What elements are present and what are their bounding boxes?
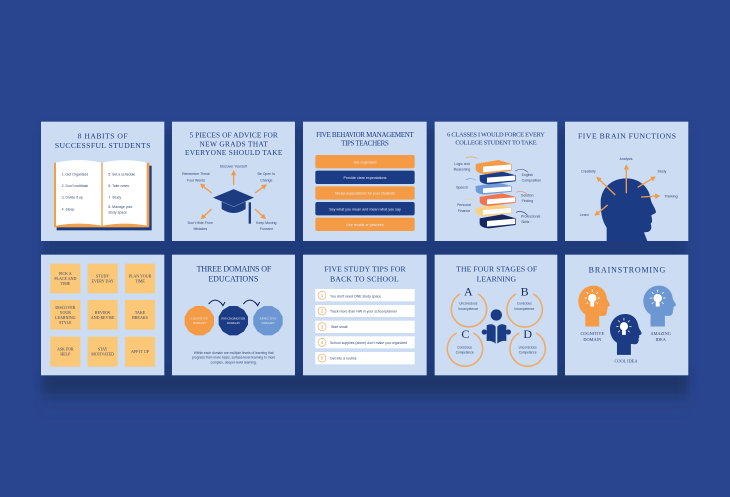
labels: Composition [522, 178, 541, 182]
icon: open book with habits list: 8. Manage your [108, 205, 133, 209]
heading: stages: THE FOUR STAGES OF [456, 265, 537, 274]
heading: domains [197, 265, 272, 284]
labels: Don't Hide From [188, 221, 213, 225]
domain badges: DOMAIN [227, 321, 241, 325]
tips list: Get into a routine [330, 357, 357, 361]
panel: 6 classes [435, 122, 557, 241]
heading: classes: COLLEGE STUDENT TO TAKE [455, 139, 537, 146]
tips list: 5 [321, 356, 324, 361]
icon: student reading [482, 309, 511, 344]
list of tips: Get organized [354, 160, 376, 164]
icon: open book with habits list: 3. Divide it up [62, 196, 83, 200]
panel: five behavior management tips [303, 122, 427, 241]
icon: navy head [610, 314, 642, 355]
domain badges [185, 306, 283, 335]
labels: Remember These [182, 172, 210, 176]
labels: Thinking [664, 194, 678, 198]
arrows [202, 172, 265, 218]
icon: light blue head [643, 286, 676, 326]
heading: domains: THREE DOMAINS OF [197, 265, 272, 274]
labels: Finance [458, 209, 470, 213]
curved arrows [466, 157, 528, 215]
labels: Learn [580, 213, 589, 217]
labels: Skills [521, 220, 530, 224]
heading: 8 habits [55, 131, 150, 150]
stage letters: C [461, 327, 469, 341]
heading: advice [185, 131, 283, 157]
sticky note text: PLAN YOUR [129, 274, 152, 279]
sticky note text: HELP [60, 351, 71, 356]
sticky note text: PLACE AND [54, 276, 76, 281]
description: complex, deeper-level learning. [211, 360, 257, 364]
labels: Finding [522, 199, 533, 203]
heading: advice: 5 PIECES OF ADVICE FOR [189, 131, 278, 140]
labels [454, 162, 541, 224]
sticky note grid [50, 264, 155, 367]
labels: Discover Yourself [220, 164, 247, 168]
labels: DOMAIN [583, 337, 602, 342]
tips list: Track more than HW in your school planner [330, 309, 398, 313]
labels: COOL IDEA [614, 359, 638, 364]
panel: five study tips [303, 255, 427, 375]
sticky note text: YOUR [60, 310, 71, 315]
arrows [596, 167, 658, 214]
icon: open book with habits list: 5. Set a schedule [108, 172, 135, 176]
sticky note text: APP IT UP [131, 349, 150, 354]
labels: Study [658, 169, 667, 173]
domain badges: AFFECTIVE [259, 317, 277, 321]
labels: Be Open to [257, 172, 275, 176]
panel: four stages of learning [435, 255, 557, 375]
domain badges: COGNITIVE [191, 317, 208, 321]
domain badges: DOMAIN [261, 321, 275, 325]
tips list: Start small [331, 325, 348, 329]
sticky note text: TIME [60, 281, 71, 286]
labels: IDEA [655, 337, 667, 342]
panel: brainstorming [565, 255, 688, 375]
labels: Keep Moving [256, 221, 277, 225]
labels: COGNITIVE [581, 331, 604, 336]
stage labels [456, 302, 537, 354]
domain badges: DOMAIN [193, 321, 207, 325]
labels: English [522, 173, 533, 177]
description: progress from more basic, surface-level learning to more [192, 356, 276, 360]
heading: study tips: FIVE STUDY TIPS FOR [324, 264, 407, 273]
heading: behavior: TIPS TEACHERS [341, 140, 389, 148]
sticky note text: PICK A [59, 271, 72, 276]
panel: sticky notes [41, 255, 164, 375]
labels: AMAZING [650, 331, 671, 336]
tips list [315, 289, 415, 364]
labels [581, 331, 671, 364]
panel: three domains [172, 255, 295, 375]
list of tips: Provide clear expectations [344, 176, 387, 180]
heading: brainstorming: BRAINSTROMING [589, 265, 666, 274]
stage labels: Unconscious [459, 302, 478, 306]
heading: study tips: BACK TO SCHOOL [330, 274, 399, 283]
stage letters: D [523, 327, 532, 341]
sticky note text: DISCOVER [55, 305, 76, 310]
labels: Professional [521, 215, 540, 219]
heading: 8 habits: 8 HABITS OF [78, 131, 128, 140]
sticky note text: EVERY DAY [92, 279, 114, 284]
icon: open book with habits list: 7. Study [108, 196, 121, 200]
list of tips: Use recalls or gestures [346, 223, 384, 227]
stage labels: Conscious [517, 302, 532, 306]
sticky note text: AND REVISE [91, 315, 115, 320]
stage labels: Competence [456, 350, 474, 354]
labels: Forward [260, 227, 273, 231]
stage letters: B [521, 284, 529, 298]
stage rings [447, 294, 545, 366]
list of tips [315, 155, 415, 231]
sticky note text: STAY [98, 346, 108, 351]
icon: open book with habits list: 6. Take notes [108, 184, 129, 188]
labels: Change [260, 178, 272, 182]
sticky note text: BREAKS [132, 315, 148, 320]
icon: orange head [578, 286, 610, 326]
heading: stages [456, 265, 537, 284]
tips list: 3 [321, 324, 324, 329]
labels: Analysis [620, 157, 633, 161]
labels: Solution [521, 193, 534, 197]
icon: open book with habits list: 2. Don't multitask [62, 184, 89, 188]
stage labels: Incompetence [458, 307, 478, 311]
sticky note text [54, 271, 152, 356]
tips list: School supplies (alone) don't make you organized [330, 341, 407, 345]
sticky note text: TIME [135, 279, 145, 284]
stage labels: Conscious [457, 345, 472, 349]
sticky note text: STYLE [59, 320, 72, 325]
sticky note text: STUDY [96, 274, 109, 279]
labels: Reasoning [454, 168, 470, 172]
sticky note text: ASK FOR [57, 346, 74, 351]
panel: 5 pieces of advice [172, 122, 295, 241]
icon: open book with habits list: 4. Sleep [62, 208, 75, 212]
tips list: You don't need ONE study space [330, 294, 381, 298]
labels: Logic and [454, 162, 470, 166]
heading: brain: FIVE BRAIN FUNCTIONS [578, 131, 676, 140]
list of tips: Model expectations for your students [335, 191, 395, 195]
labels: Creativity [581, 169, 596, 173]
icon: open book with habits list [54, 160, 152, 230]
labels: Personal [457, 203, 471, 207]
sticky note text: REVIEW [95, 310, 111, 315]
domain badges: PSYCHOMOTOR [221, 317, 246, 321]
curved arrows [209, 300, 260, 306]
icon: stack of books [476, 160, 516, 228]
icon: open book with habits list: study space [108, 211, 127, 215]
stage letters: A [464, 284, 473, 298]
labels: Four Words [187, 178, 205, 182]
heading: advice: EVERYONE SHOULD TAKE [185, 148, 283, 157]
stage labels: Competence [519, 350, 537, 354]
tips list: 1 [321, 293, 324, 298]
list of tips: Say what you mean and mean what you say [329, 207, 401, 211]
heading: behavior: FIVE BEHAVIOR MANAGEMENT [316, 131, 415, 139]
labels: Speech [456, 185, 468, 189]
heading: domains: EDUCATIONS [208, 275, 258, 284]
panel: 8 habits of successful students [41, 122, 164, 241]
tips list: 2 [321, 309, 324, 314]
panel: five brain functions [565, 122, 688, 241]
icon: head silhouette [601, 178, 656, 241]
sticky note text: MOTIVATED [91, 351, 114, 356]
labels [182, 164, 277, 231]
stage labels: Incompetence [514, 307, 534, 311]
heading: study tips [324, 264, 407, 283]
sticky note text: TAKE [135, 310, 146, 315]
description [192, 351, 276, 364]
sticky note text: LEARNING [55, 315, 76, 320]
heading: classes: 6 CLASSES I WOULD FORCE EVERY [447, 132, 545, 139]
stage labels: Unconscious [519, 345, 537, 349]
heading: advice: NEW GRADS THAT [199, 139, 268, 148]
labels [580, 157, 678, 217]
stage letters [461, 284, 532, 341]
heading: stages: LEARNING [477, 275, 516, 284]
heading: classes [447, 132, 545, 146]
icon: graduation cap [213, 189, 254, 224]
heading: 8 habits: SUCCESSFUL STUDENTS [55, 141, 150, 150]
labels: Mistakes [193, 227, 207, 231]
heading: behavior [316, 131, 415, 148]
icon: open book with habits list: 1. Get Organised [62, 172, 88, 176]
tips list: 4 [321, 340, 324, 345]
description: Within each domain are multiple levels of learning that [194, 351, 274, 355]
